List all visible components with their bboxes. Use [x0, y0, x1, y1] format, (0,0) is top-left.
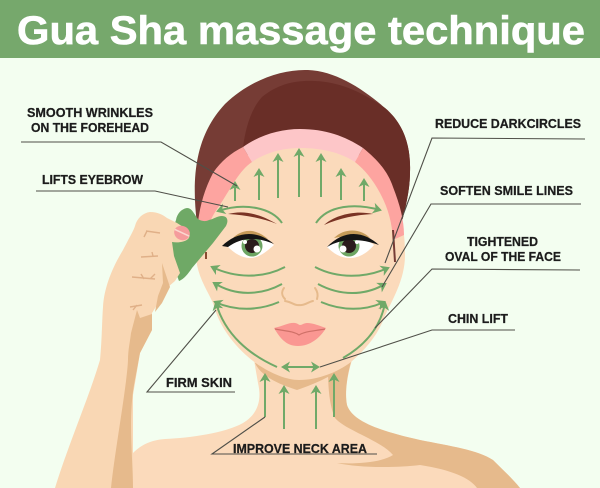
label: smooth wrinkles: ON THE FOREHEAD — [31, 121, 149, 135]
massage arrows: brows — [218, 206, 380, 223]
right eye — [327, 230, 379, 258]
label: reduce darkcircles — [385, 117, 585, 263]
title banner: Gua Sha massage technique — [17, 9, 585, 53]
lips — [274, 323, 326, 346]
label: improve neck area — [212, 417, 377, 456]
label: tightened oval: OVAL OF THE FACE — [445, 250, 561, 264]
label: soften smile lines — [382, 184, 581, 287]
label: lifts eyebrow: LIFTS EYEBROW — [42, 173, 143, 187]
label: lifts eyebrow — [36, 173, 228, 207]
body and shoulders — [133, 360, 520, 488]
label: improve neck area: IMPROVE NECK AREA — [233, 442, 367, 456]
title banner — [0, 0, 600, 58]
headband — [198, 129, 404, 240]
hair strands at temples — [206, 230, 395, 262]
eyebrows — [228, 212, 373, 225]
hair — [195, 70, 410, 240]
finger creases — [130, 231, 160, 310]
label: reduce darkcircles: REDUCE DARKCIRCLES — [435, 117, 581, 131]
label: chin lift — [320, 312, 515, 367]
left eye — [222, 231, 274, 258]
massage arrows: forehead — [235, 150, 364, 201]
label: tightened oval — [375, 235, 580, 328]
label: smooth wrinkles — [21, 106, 237, 186]
label: chin lift: CHIN LIFT — [448, 312, 508, 326]
illustration: woman with gua sha — [55, 70, 520, 488]
gua sha stone — [168, 208, 227, 281]
massage arrows: jaw and chin — [216, 303, 385, 367]
face — [196, 135, 405, 380]
label: firm skin — [147, 310, 235, 392]
massage arrows: neck — [265, 375, 334, 429]
label: firm skin: FIRM SKIN — [166, 376, 232, 390]
nose — [282, 288, 318, 305]
thumb nail — [172, 223, 192, 243]
massage arrows: cheeks — [212, 267, 388, 309]
label: soften smile lines: SOFTEN SMILE LINES — [440, 184, 573, 198]
neck shadow under chin — [255, 350, 351, 390]
raised hand — [55, 212, 190, 488]
shoulder shadow — [328, 362, 520, 488]
label: tightened oval: TIGHTENED — [467, 235, 538, 249]
label: smooth wrinkles: SMOOTH WRINKLES — [27, 106, 153, 120]
